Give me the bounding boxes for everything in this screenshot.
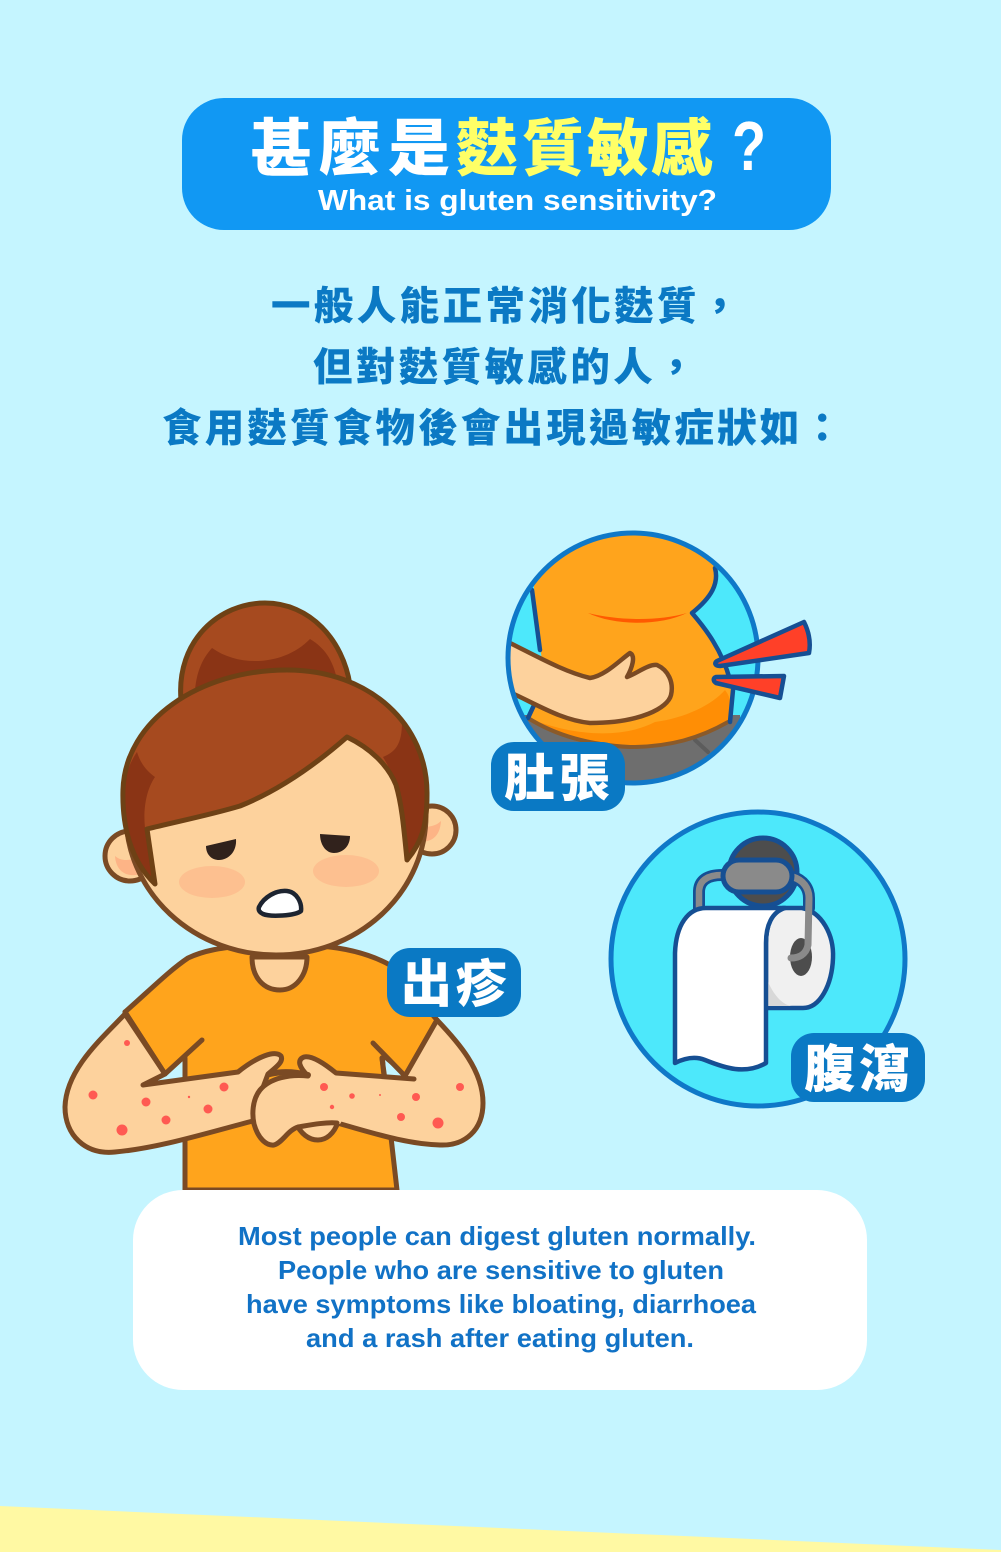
right sleeve edge (373, 1020, 437, 1076)
holder knob (729, 838, 797, 906)
finger crease (270, 1072, 308, 1075)
shirt body (530, 536, 731, 734)
t-shirt (125, 946, 437, 1190)
torso (510, 536, 740, 780)
front hand outline (253, 1076, 337, 1145)
shirt shadow (528, 690, 731, 747)
icon: bloating circle (500, 520, 810, 790)
title: Chinese heading: 麩質敏感 (456, 115, 713, 184)
holder right arm outline (793, 877, 809, 908)
icon: toilet roll circle (611, 812, 905, 1106)
holder pill cap (723, 860, 792, 892)
description text: People who are sensitive to gluten (278, 1255, 724, 1285)
label: rash: 出疹 (401, 956, 507, 1013)
face (126, 675, 426, 955)
torso side lines (185, 1058, 385, 1085)
title: question mark: ? (732, 107, 766, 185)
label: bloating: 肚張 (504, 750, 610, 807)
cheeks (179, 855, 379, 898)
mouth (259, 891, 301, 916)
illustration: woman with rash (65, 603, 483, 1190)
roll shade (768, 982, 792, 1006)
bottom yellow band (0, 1506, 1001, 1552)
eyes (206, 834, 350, 860)
description text: Most people can digest gluten normally. (238, 1221, 756, 1251)
circle outline (508, 533, 758, 783)
intro line 3: 食用麩質食物後會出現過敏症狀如： (162, 406, 845, 451)
neckline (252, 957, 307, 990)
shirt outline (528, 568, 733, 722)
rash spots (88, 1040, 464, 1136)
roll end (766, 908, 833, 1008)
description text: and a rash after eating gluten. (306, 1323, 694, 1353)
hair (123, 670, 427, 884)
ears (105, 806, 456, 881)
hair bun (181, 603, 350, 700)
holder left arm (699, 875, 722, 910)
right arm fill (270, 1020, 483, 1145)
label: rash (387, 948, 521, 1017)
description text (238, 1221, 757, 1353)
intro line 2: 但對麩質敏感的人， (313, 345, 699, 390)
trousers (524, 715, 740, 780)
lower fingers (295, 1122, 338, 1140)
roll hole (790, 938, 812, 976)
description text: have symptoms like bloating, diarrhoea (246, 1289, 757, 1319)
sleeve gaps (144, 1060, 414, 1084)
English description box (133, 1190, 867, 1390)
title banner (182, 98, 831, 230)
intro text (162, 285, 845, 451)
paper sheet (675, 908, 785, 1069)
title: Chinese heading: 甚麼是 (250, 115, 450, 184)
belt line (528, 718, 728, 747)
left sleeve edge (125, 1012, 202, 1074)
title: English subtitle: What is gluten sensitivity? (318, 185, 717, 217)
front hand (253, 1076, 360, 1145)
holder right arm (791, 877, 809, 958)
intro line 1: 一般人能正常消化麩質， (271, 285, 743, 329)
label: diarrhoea: 腹瀉 (804, 1041, 910, 1098)
left arm (65, 1014, 282, 1152)
pain spike lower (714, 676, 784, 698)
label: bloating (491, 742, 625, 811)
label: diarrhoea (791, 1033, 925, 1102)
belly crease (588, 613, 687, 623)
arm (500, 640, 672, 723)
right arm outline (300, 1020, 483, 1145)
pain spike upper (715, 622, 810, 666)
